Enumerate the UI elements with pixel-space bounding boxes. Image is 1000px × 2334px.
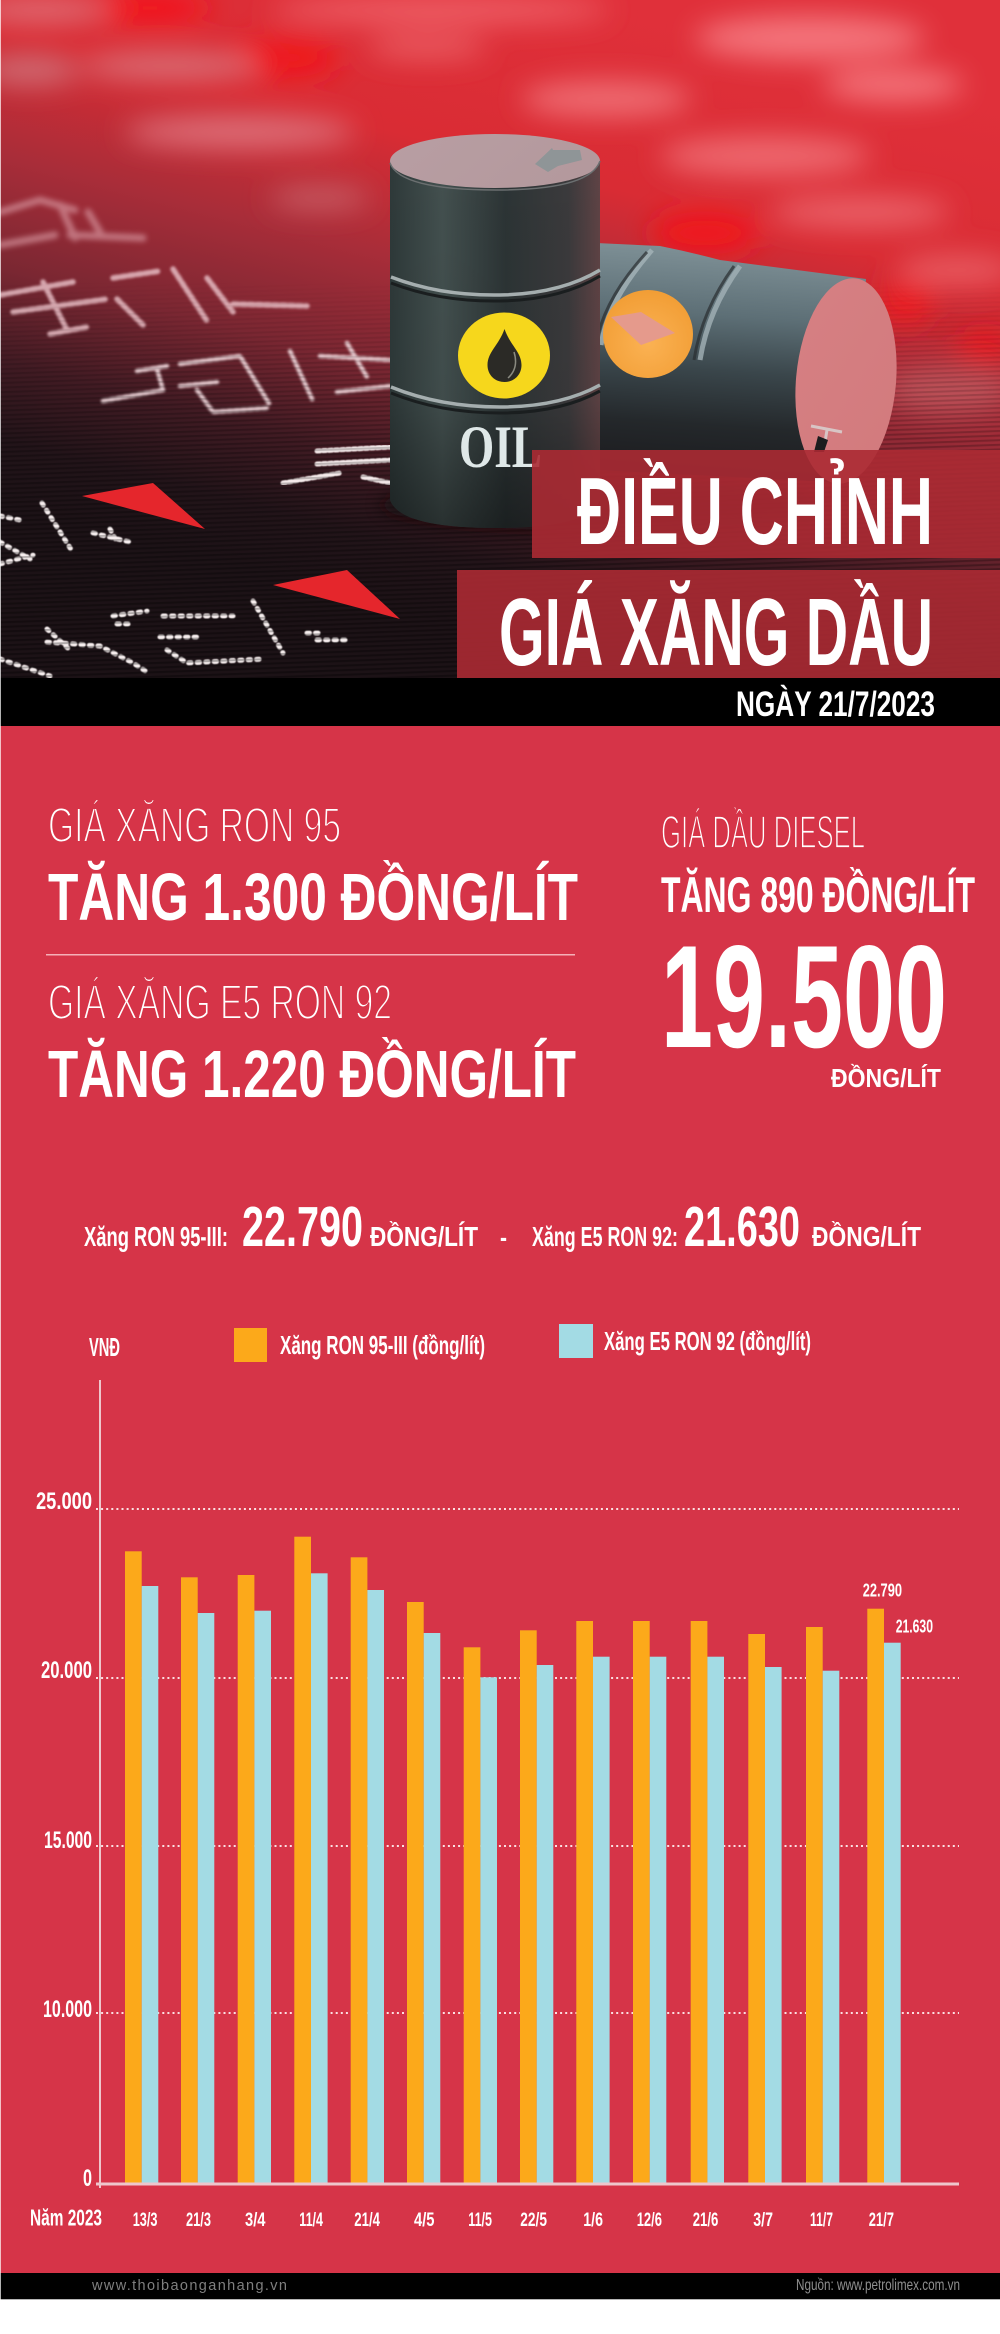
text block: RON 95: GIÁ XĂNG RON 95 (48, 798, 341, 853)
legend: RON 95-III: Xăng RON 95-III (đồng/lít) (280, 1330, 485, 1360)
bars: 21/3 (181, 1577, 214, 2184)
x-axis labels: 11/7 (810, 2210, 833, 2231)
y-axis labels (36, 1488, 92, 2192)
text block: RON 95: TĂNG 1.300 ĐỒNG/LÍT (48, 860, 578, 935)
text block: diesel: ĐỒNG/LÍT (831, 1063, 941, 1093)
x-axis labels: 4/5 (414, 2210, 435, 2231)
x-axis title: Năm 2023 (30, 2204, 102, 2230)
x-axis labels: 11/5 (468, 2210, 492, 2231)
current prices row: Xăng E5 RON 92: (532, 1221, 678, 1252)
bars: 4/5 (407, 1602, 440, 2184)
current prices row: ĐỒNG/LÍT (812, 1221, 921, 1252)
red triangles (82, 483, 400, 619)
current prices row: ĐỒNG/LÍT (370, 1221, 478, 1252)
standing barrel (390, 134, 600, 528)
bars: 22/5 (520, 1630, 553, 2184)
y-axis labels: 15.000 (44, 1827, 92, 1854)
y-axis labels: 0 (83, 2165, 92, 2192)
x-axis labels: 13/3 (133, 2210, 158, 2231)
value labels: 21.630 (896, 1616, 933, 1637)
x-axis labels: 3/7 (753, 2210, 773, 2231)
bars: 21/6 (691, 1621, 724, 2184)
current prices row: 21.630 (684, 1195, 800, 1259)
x-axis labels: 1/6 (583, 2210, 603, 2231)
axes (96, 1380, 959, 2188)
y-axis labels: 10.000 (43, 1996, 92, 2023)
legend: E5 RON 92: Xăng E5 RON 92 (đồng/lít) (604, 1326, 811, 1356)
bars: 11/7 (806, 1627, 839, 2184)
date band (0, 678, 1000, 726)
x-axis labels (133, 2210, 894, 2231)
x-axis labels: 3/4 (245, 2210, 266, 2231)
text block: E5 RON 92 (48, 975, 576, 1112)
scan lines (0, 280, 1000, 680)
current prices row: 22.790 (242, 1195, 363, 1259)
bars: 1/6 (576, 1621, 610, 2184)
hero photo: oil barrels on red stock ticker (0, 0, 1000, 680)
x-axis labels: 21/4 (354, 2210, 380, 2231)
text block: diesel (661, 806, 975, 1093)
legend: RON 95-III (234, 1328, 485, 1362)
footer band: www.thoibaonganhang.vn (91, 2278, 287, 2294)
main red panel (0, 726, 1000, 2273)
y-axis labels: 20.000 (41, 1657, 92, 1684)
text block: E5 RON 92: GIÁ XĂNG E5 RON 92 (48, 975, 392, 1030)
bars: 21/4 (351, 1557, 384, 2184)
x-axis labels: 22/5 (520, 2210, 547, 2231)
bars: 3/7 (748, 1634, 782, 2184)
bars: 11/4 (294, 1537, 328, 2184)
current prices row: Xăng RON 95-III: (84, 1221, 228, 1252)
bars: 11/5 (464, 1647, 497, 2184)
ticker dot characters (photo texture) (0, 200, 390, 676)
barrel label OIL: OIL (459, 414, 542, 480)
barrel shadow (380, 491, 532, 534)
x-axis labels: 12/6 (637, 2210, 662, 2231)
value labels: 22.790 (863, 1580, 902, 1601)
current prices row (84, 1195, 921, 1259)
lying barrel (596, 243, 905, 488)
bars: 13/3 (125, 1551, 158, 2184)
footer band (0, 2273, 1000, 2300)
date band: NGÀY 21/7/2023 (736, 684, 935, 724)
x-axis labels: 11/4 (299, 2210, 323, 2231)
x-axis labels: 21/7 (869, 2210, 894, 2231)
text block: E5 RON 92: TĂNG 1.220 ĐỒNG/LÍT (48, 1037, 576, 1112)
value labels (863, 1580, 933, 1637)
bars: 3/4 (238, 1575, 271, 2184)
axis unit: VNĐ (89, 1332, 120, 1362)
legend: E5 RON 92 (559, 1324, 811, 1358)
x-axis labels: 21/6 (693, 2210, 718, 2231)
bar chart (30, 1324, 959, 2231)
y-axis labels: 25.000 (36, 1488, 92, 1515)
bars: 12/6 (633, 1621, 666, 2184)
x-axis labels: 21/3 (186, 2210, 211, 2231)
current prices row: - (500, 1222, 507, 1252)
text block: RON 95 (48, 798, 578, 935)
bars: 21/7 (867, 1609, 901, 2184)
icon: yellow oil drop badge (458, 312, 550, 398)
